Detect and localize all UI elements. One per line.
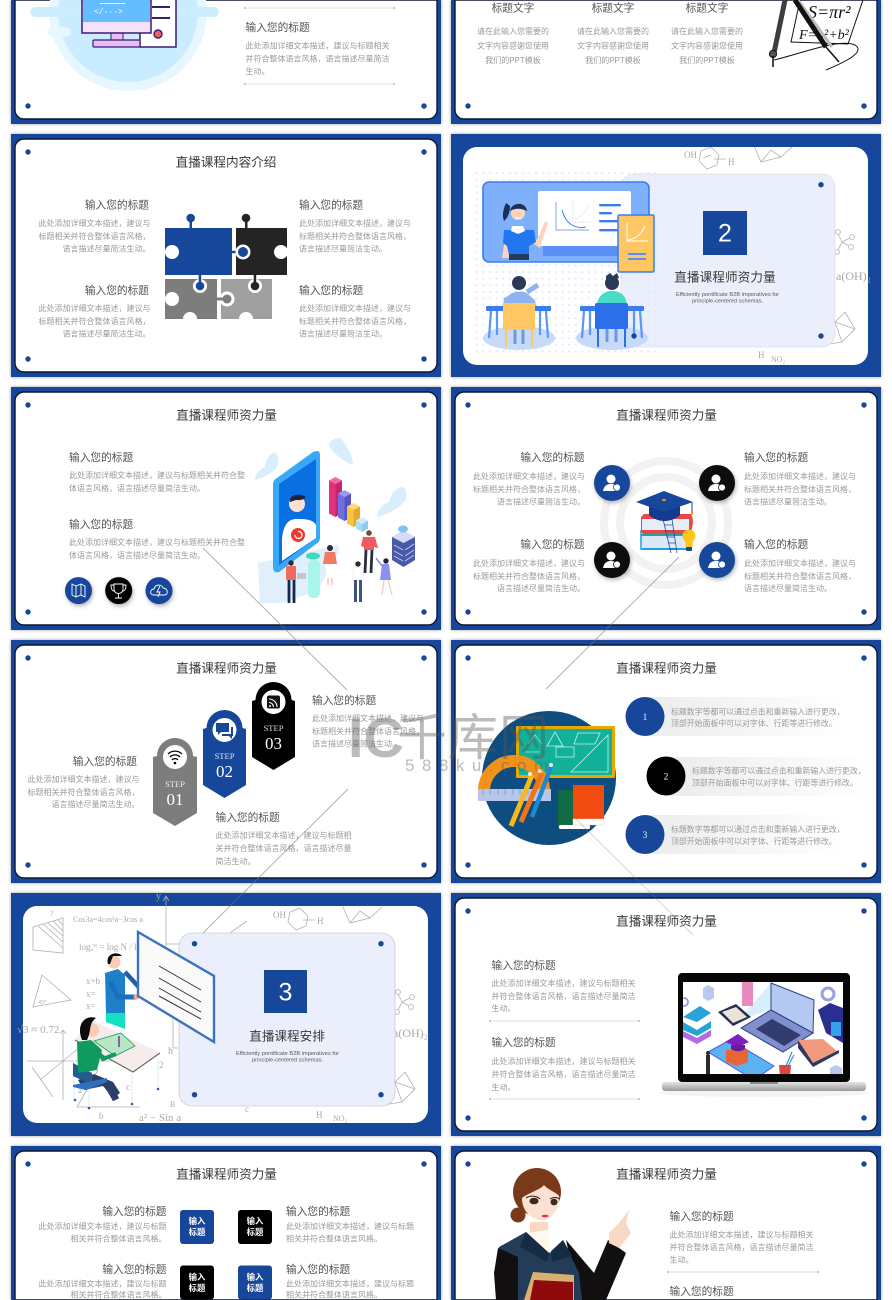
text block bottom left: 标题相关并符合整体语言风格，	[473, 571, 585, 581]
text block bottom left: 此处添加详细文本描述，建议与	[473, 558, 585, 568]
block bottom right: 标题	[247, 1283, 264, 1293]
illustration: teacher pointing at board	[105, 932, 214, 1042]
text block step 1: 输入您的标题	[73, 755, 137, 768]
math doodles: 45°	[38, 999, 47, 1006]
text block top right: 标题相关并符合整体语言风格，	[299, 231, 411, 241]
block bottom right: 输入	[247, 1272, 264, 1282]
text block step 3: 此处添加详细文本描述，建议与	[312, 713, 424, 723]
icon: map	[65, 577, 92, 604]
text block step 2: 简洁生动。	[216, 856, 256, 866]
text block 1	[670, 1210, 814, 1264]
text block bottom right: 标题相关并符合整体语言风格，	[299, 316, 411, 326]
text block 1	[69, 451, 245, 493]
slide background	[11, 893, 441, 1136]
text block 1: 体语言风格，语言描述尽量简洁生动。	[69, 483, 205, 493]
math doodles: h	[168, 1046, 173, 1057]
step 03 badge	[252, 682, 295, 770]
text block top left	[473, 451, 585, 506]
doodle: calcium hydroxide formula: a(OH)₂	[836, 269, 871, 283]
column 3	[671, 2, 743, 65]
text block step 3: 标题相关并符合整体语言风格，	[312, 726, 424, 736]
divider 1	[489, 1020, 640, 1022]
step 03 badge: STEP	[264, 723, 284, 733]
text block bottom left	[38, 284, 150, 338]
text block top right: 输入您的标题	[299, 198, 363, 212]
text block bottom left: 语言描述尽量简洁生动。	[497, 583, 585, 593]
text block bottom right: 语言描述尽量简洁生动。	[744, 583, 832, 593]
row 1: 顶部开始面板中可以对字体、行距等进行修改。	[671, 718, 837, 728]
illustration: student left	[483, 276, 555, 350]
column 1	[477, 2, 549, 65]
body text: 生动。	[246, 66, 270, 76]
slide frame	[451, 387, 881, 630]
bars	[329, 477, 368, 532]
text block top right: 输入您的标题	[286, 1205, 350, 1218]
text block bottom left: 此处添加详细文本描述，建议与	[38, 303, 150, 313]
column 3: 我们的PPT模板	[679, 55, 735, 65]
illustration: compass and formulas: F=a²+b²	[798, 28, 850, 43]
block top left	[180, 1210, 214, 1244]
text block 2: 输入您的标题	[492, 1036, 556, 1049]
text block bottom left: 语言描述尽量简洁生动。	[62, 328, 150, 338]
text block 2	[492, 1036, 636, 1092]
text block top left: 输入您的标题	[85, 198, 149, 212]
math doodles: H	[317, 916, 324, 926]
text block step 3: 语言描述尽量简洁生动。	[312, 738, 400, 748]
heading 2: 输入您的标题	[670, 1285, 734, 1298]
text block 1: 输入您的标题	[670, 1210, 734, 1223]
slide: teacher strength with phone illustration	[11, 387, 441, 630]
slide frame	[451, 640, 881, 883]
column 1: 文字内容感谢您使用	[477, 40, 549, 50]
math doodles: ?	[50, 909, 54, 918]
text block 1: 输入您的标题	[69, 451, 133, 464]
number square: 3	[279, 978, 292, 1006]
text block bottom left: 此处添加详细文本描述，建议与标题	[38, 1278, 166, 1288]
row 3: 标题数字等都可以通过点击和重新输入进行更改，	[671, 824, 845, 834]
row 2: 顶部开始面板中可以对字体、行距等进行修改。	[692, 778, 858, 788]
text block step 2: 输入您的标题	[216, 811, 280, 824]
text block top left: 输入您的标题	[520, 451, 585, 464]
text block top left	[38, 1205, 167, 1244]
text block bottom right: 相关并符合整体语言风格。	[286, 1290, 382, 1300]
illustration: computer on light blue circle	[30, 0, 219, 91]
slide: section 2 teacher strength	[451, 134, 881, 377]
math doodles: c	[126, 1082, 130, 1092]
math doodles: Cos3a=4cos³a−3cos a	[73, 915, 143, 924]
title: 直播课程内容介绍	[176, 154, 276, 170]
text block bottom left: 相关并符合整体语言风格。	[70, 1290, 166, 1300]
person icon black bottom left	[594, 542, 630, 578]
text block bottom left: 输入您的标题	[520, 538, 585, 551]
person icon black top right	[699, 465, 735, 501]
illustration: student right	[576, 273, 648, 350]
math doodles: a(OH)₂	[393, 1026, 428, 1040]
math doodles: B	[170, 1100, 175, 1109]
column 2	[577, 2, 649, 65]
math and chemistry doodles: H	[728, 157, 735, 167]
clouds	[255, 438, 407, 517]
server	[392, 531, 415, 567]
math doodles: y	[156, 891, 161, 902]
concentric rings	[604, 461, 728, 585]
text block bottom left: 输入您的标题	[102, 1263, 167, 1276]
slide: teacher strength numbered list	[451, 640, 881, 883]
title: 直播课程师资力量	[176, 662, 277, 676]
watermark logo	[348, 706, 556, 775]
math and chemistry doodles	[684, 146, 855, 364]
slide frame	[11, 0, 441, 124]
illustration: compass and formulas	[769, 0, 863, 70]
slide: teacher strength steps	[11, 640, 441, 883]
slide frame	[11, 134, 441, 377]
text block 2: 体语言风格，语言描述尽量简洁生动。	[69, 550, 205, 560]
column 2: 我们的PPT模板	[585, 55, 641, 65]
step 01 badge	[153, 738, 197, 826]
column 3: 请在此输入您需要的	[671, 26, 743, 36]
slide frame	[11, 1146, 441, 1300]
text block step 1: 此处添加详细文本描述，建议与	[28, 774, 140, 784]
title: 直播课程师资力量	[616, 408, 717, 422]
block bottom right	[238, 1266, 272, 1300]
block top right: 输入	[247, 1216, 264, 1226]
icon: trophy	[105, 577, 132, 604]
person icon blue bottom right	[699, 542, 735, 578]
text block top left: 标题相关并符合整体语言风格，	[38, 231, 150, 241]
column 2: 文字内容感谢您使用	[577, 40, 649, 50]
text block bottom right: 此处添加详细文本描述，建议与标题	[286, 1278, 414, 1288]
text block top right: 此处添加详细文本描述，建议与	[744, 471, 856, 481]
number square	[264, 970, 307, 1013]
illustration: isometric phone scene	[255, 438, 415, 603]
section title: 直播课程师资力量	[674, 270, 776, 284]
text block step 3: 输入您的标题	[312, 694, 376, 707]
panel corner dots	[631, 182, 824, 339]
math doodles: x=	[86, 989, 96, 999]
divider bottom	[244, 83, 395, 85]
math doodles: logₐᴺ = log N / log a	[79, 942, 152, 952]
text block top right	[299, 198, 411, 254]
section subtitle: Efficiently pontificate B2B imperatives for	[676, 292, 779, 298]
section title: 直播课程安排	[249, 1030, 325, 1044]
text block bottom left: 标题相关并符合整体语言风格，	[38, 316, 150, 326]
row 2: 2	[664, 772, 668, 782]
row 2: 标题数字等都可以通过点击和重新输入进行更改，	[692, 766, 866, 776]
row 3: 3	[643, 830, 648, 840]
section subtitle: principle-centered schemas.	[692, 298, 763, 304]
text block top left: 相关并符合整体语言风格。	[70, 1234, 166, 1244]
slide: teacher strength with laptop	[451, 893, 881, 1136]
math doodles: NO₂	[333, 1114, 348, 1123]
illustration: yellow graph card	[618, 215, 654, 272]
text block top right	[744, 451, 856, 506]
row 3	[626, 815, 845, 854]
slide frame	[451, 1146, 881, 1300]
illustration: graduation cap, books, bulb	[636, 491, 696, 553]
text block bottom right: 输入您的标题	[744, 538, 808, 551]
text block bottom left	[473, 538, 585, 593]
title: 直播课程师资力量	[616, 1168, 717, 1182]
text block step 2: 关并符合整体语言风格，语言描述尽量	[216, 843, 352, 853]
section subtitle: Efficiently pontificate B2B imperatives for	[236, 1051, 339, 1057]
math and chemistry doodles: OH	[684, 150, 697, 160]
number square	[703, 211, 747, 255]
block top right: 标题	[247, 1227, 264, 1237]
column 1: 标题文字	[492, 2, 534, 14]
content panel	[621, 174, 835, 347]
text block 1	[492, 959, 636, 1013]
column 2: 请在此输入您需要的	[577, 26, 649, 36]
text block 1: 并符合整体语言风格，语言描述尽量简洁	[670, 1242, 814, 1252]
text block top right: 此处添加详细文本描述，建议与	[299, 218, 411, 228]
block bottom left: 输入	[189, 1272, 206, 1282]
text block 2	[69, 518, 245, 560]
step 02 badge	[203, 710, 246, 798]
math and chemistry doodles: NO₂	[771, 355, 786, 364]
text block bottom left	[38, 1263, 167, 1300]
person icon blue top left	[594, 465, 630, 501]
text block bottom right: 输入您的标题	[286, 1263, 350, 1276]
text block 1: 生动。	[492, 1003, 516, 1013]
slide: live course content introduction with puzzle	[11, 134, 441, 377]
section subtitle	[236, 1051, 339, 1064]
slide: teacher strength with four blocks	[11, 1146, 441, 1300]
illustration: student at desk	[73, 1017, 160, 1109]
step 01 badge: 01	[166, 790, 184, 809]
illustration: woman teacher pointing	[494, 1168, 631, 1300]
section subtitle: principle-centered schemas.	[252, 1058, 323, 1064]
body text	[246, 40, 390, 76]
title: 直播课程师资力量	[176, 1168, 277, 1182]
text block bottom right: 此处添加详细文本描述，建议与	[744, 558, 856, 568]
text block top right: 语言描述尽量简洁生动。	[744, 496, 832, 506]
row 1: 标题数字等都可以通过点击和重新输入进行更改，	[671, 706, 845, 716]
slide frame	[11, 387, 441, 630]
text block step 1: 标题相关并符合整体语言风格，	[28, 787, 140, 797]
text block bottom left: 输入您的标题	[85, 284, 149, 297]
text block top left: 此处添加详细文本描述，建议与标题	[38, 1221, 166, 1231]
column 3: 标题文字	[686, 2, 728, 14]
text block top left: 语言描述尽量简洁生动。	[497, 496, 585, 506]
block bottom left	[180, 1266, 214, 1300]
desk	[258, 545, 339, 603]
body text: 并符合整体语言风格，语言描述尽量简洁	[246, 54, 390, 64]
title: 直播课程师资力量	[616, 914, 717, 928]
column 1: 请在此输入您需要的	[477, 26, 549, 36]
heading: 输入您的标题	[246, 21, 310, 34]
illustration: compass and formulas: S=πr²	[808, 2, 851, 22]
text block top left	[38, 198, 150, 254]
block top right	[238, 1210, 272, 1244]
step 02 badge: STEP	[215, 751, 235, 761]
watermark logo: IC	[348, 706, 404, 769]
slide: computer illustration, top left	[11, 0, 441, 124]
text block top right: 相关并符合整体语言风格。	[286, 1234, 382, 1244]
math doodles: b	[99, 1111, 104, 1121]
slide: teacher strength with woman teacher	[451, 1146, 881, 1300]
dotted backdrop	[473, 171, 660, 352]
text block top right	[286, 1205, 414, 1244]
slide frame	[11, 640, 441, 883]
slide: three columns with compass, top right	[451, 0, 881, 124]
text block 1: 此处添加详细文本描述，建议与标题相关并符合整	[69, 470, 245, 480]
people	[286, 530, 392, 603]
text block bottom right	[299, 284, 411, 338]
text block step 1: 语言描述尽量简洁生动。	[52, 799, 140, 809]
divider 2	[489, 1098, 640, 1100]
slide: teacher strength with graduation cap	[451, 387, 881, 630]
text block step 2: 此处添加详细文本描述，建议与标题相	[216, 830, 352, 840]
content panel	[179, 933, 395, 1106]
title: 直播课程师资力量	[616, 662, 717, 676]
teal pillar	[308, 560, 320, 598]
illustration: teacher at board	[483, 182, 649, 262]
icon: cloud with bolt	[146, 577, 172, 604]
math doodles: x=	[86, 1001, 96, 1011]
math doodles: √3 ≈ 0.72	[17, 1024, 59, 1036]
step 02 badge: 02	[216, 762, 233, 781]
row 2	[646, 756, 871, 796]
row 1	[626, 697, 845, 736]
text block top right: 标题相关并符合整体语言风格，	[744, 484, 856, 494]
block top left: 标题	[189, 1227, 206, 1237]
text block bottom right	[286, 1263, 414, 1300]
watermark diagonals	[203, 548, 693, 935]
text block bottom right: 输入您的标题	[299, 284, 363, 297]
slide frame	[451, 893, 881, 1136]
math doodles: x+b	[86, 976, 101, 986]
text block 1: 生动。	[670, 1254, 694, 1264]
text block 2: 此处添加详细文本描述，建议与标题相关	[492, 1056, 636, 1066]
text block 1: 并符合整体语言风格，语言描述尽量简洁	[492, 991, 636, 1001]
text block bottom right: 语言描述尽量简洁生动。	[299, 328, 387, 338]
text block 1: 输入您的标题	[492, 959, 556, 972]
slide: section 3 course schedule	[11, 891, 441, 1136]
illustration: computer on light blue circle: </···>	[94, 8, 123, 17]
text block top right: 输入您的标题	[744, 451, 808, 464]
text block top right: 语言描述尽量简洁生动。	[299, 244, 387, 254]
panel corner dots	[192, 941, 384, 1097]
block bottom left: 标题	[189, 1283, 206, 1293]
watermark logo: 588ku.com	[405, 756, 556, 775]
text block top left: 语言描述尽量简洁生动。	[62, 244, 150, 254]
slide background	[451, 134, 881, 377]
step 03 badge: 03	[265, 734, 282, 753]
puzzle graphic	[165, 214, 288, 326]
text block top left: 此处添加详细文本描述，建议与	[473, 471, 585, 481]
text block top left: 此处添加详细文本描述，建议与	[38, 218, 150, 228]
text block top right: 此处添加详细文本描述，建议与标题	[286, 1221, 414, 1231]
column 1: 我们的PPT模板	[485, 55, 541, 65]
section subtitle	[676, 292, 779, 304]
text block bottom right: 标题相关并符合整体语言风格，	[744, 571, 856, 581]
text block 1: 此处添加详细文本描述，建议与标题相关	[492, 978, 636, 988]
divider	[667, 1271, 819, 1273]
column 2: 标题文字	[592, 2, 634, 14]
math doodles: a² − Sin a	[139, 1112, 181, 1124]
text block step 1	[28, 755, 140, 809]
math doodles: OH	[273, 910, 286, 920]
step 01 badge: STEP	[165, 779, 185, 789]
math and chemistry doodles: H	[758, 350, 765, 360]
math doodles: H	[316, 1110, 323, 1120]
text block top left: 输入您的标题	[102, 1205, 167, 1218]
text block 2: 生动。	[492, 1082, 516, 1092]
text block bottom right	[744, 538, 856, 593]
illustration: laptop	[659, 973, 869, 1097]
math doodles	[17, 891, 428, 1124]
text block 1: 此处添加详细文本描述，建议与标题相关	[670, 1230, 814, 1240]
row 1: 1	[643, 712, 647, 722]
text block step 2	[216, 811, 352, 866]
text block top left: 标题相关并符合整体语言风格，	[473, 484, 585, 494]
divider top	[244, 7, 395, 9]
text block step 3	[312, 694, 424, 748]
slide frame	[451, 0, 881, 124]
block top left: 输入	[189, 1216, 206, 1226]
text block 2: 此处添加详细文本描述，建议与标题相关并符合整	[69, 537, 245, 547]
title: 直播课程师资力量	[176, 408, 277, 422]
text block 2: 输入您的标题	[69, 518, 133, 531]
illustration: classroom tools in circle	[478, 711, 616, 845]
watermark logo: 千库网	[397, 710, 550, 766]
body text: 此处添加详细文本描述，建议与标题相关	[246, 40, 390, 50]
math doodles: a	[78, 1085, 82, 1095]
number square: 2	[718, 220, 732, 248]
text block bottom right: 此处添加详细文本描述，建议与	[299, 303, 411, 313]
column 3: 文字内容感谢您使用	[671, 40, 743, 50]
text block 2: 并符合整体语言风格，语言描述尽量简洁	[492, 1069, 636, 1079]
row 3: 顶部开始面板中可以对字体、行距等进行修改。	[671, 836, 837, 846]
math doodles: c	[245, 1104, 249, 1114]
math doodles: 2	[159, 1060, 164, 1070]
phone	[273, 451, 320, 572]
